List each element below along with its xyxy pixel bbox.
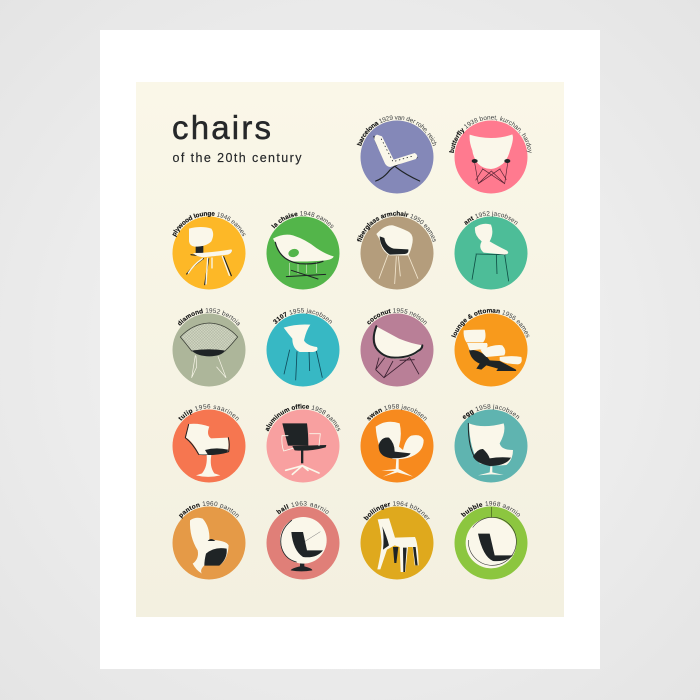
chair: bollinger: bollinger 1964 bötzner <box>363 501 430 520</box>
title <box>172 109 302 165</box>
chair: 3107 <box>266 308 340 386</box>
chair: ant: ant 1952 jacobsen <box>464 210 518 225</box>
chair: diamond: diamond 1952 bertoia <box>178 308 240 326</box>
chair: ball <box>266 501 340 580</box>
chair: tulip: tulip 1956 saarinen <box>178 404 239 421</box>
chair: swan: swan 1958 jacobsen <box>367 404 427 421</box>
chair: egg: egg 1958 jacobsen <box>462 404 520 420</box>
chair: lounge and ottoman <box>451 308 530 386</box>
chair: fiberglass armchair: fiberglass armchair 1950 eames <box>356 210 436 242</box>
title: of the 20th century <box>172 151 302 165</box>
chair: bollinger <box>360 501 434 580</box>
chair: aluminum office: aluminum office 1958 eames <box>266 404 340 432</box>
title: chairs <box>172 109 271 146</box>
chair: coconut <box>360 308 434 386</box>
white paper sheet <box>100 30 600 669</box>
chair: barcelona <box>356 115 436 194</box>
chair: lounge and ottoman: lounge & ottoman 1956 eames <box>451 308 530 338</box>
chair: 3107: 3107 1955 jacobsen <box>273 308 332 324</box>
chair: bubble: bubble 1968 aarnio <box>460 501 520 518</box>
chair: barcelona: barcelona 1929 van der rohe, reich <box>356 115 436 146</box>
chair: la chaise <box>266 211 340 290</box>
chair: plywood lounge <box>172 212 246 290</box>
chair: panton <box>172 501 246 580</box>
cream poster panel <box>136 82 564 617</box>
chair: la chaise: la chaise 1948 eames <box>271 211 334 228</box>
chair: tulip <box>172 404 246 482</box>
chair: diamond <box>172 308 246 386</box>
chair: butterfly <box>449 116 532 194</box>
chair: butterfly: butterfly 1938 bonet, kurchan, hardoy <box>449 116 532 153</box>
chair: ball: ball 1963 aarnio <box>276 501 329 514</box>
chair: egg <box>454 404 528 482</box>
chair: plywood lounge: plywood lounge 1946 eames <box>172 212 246 238</box>
chair: fiberglass armchair <box>356 210 436 290</box>
chair: bubble <box>454 501 528 580</box>
chair: coconut: coconut 1955 nelson <box>367 308 427 325</box>
chair: swan <box>360 404 434 482</box>
chair: panton: panton 1960 panton <box>178 501 239 519</box>
chair: aluminum office <box>266 404 340 482</box>
chair: ant <box>454 210 528 290</box>
